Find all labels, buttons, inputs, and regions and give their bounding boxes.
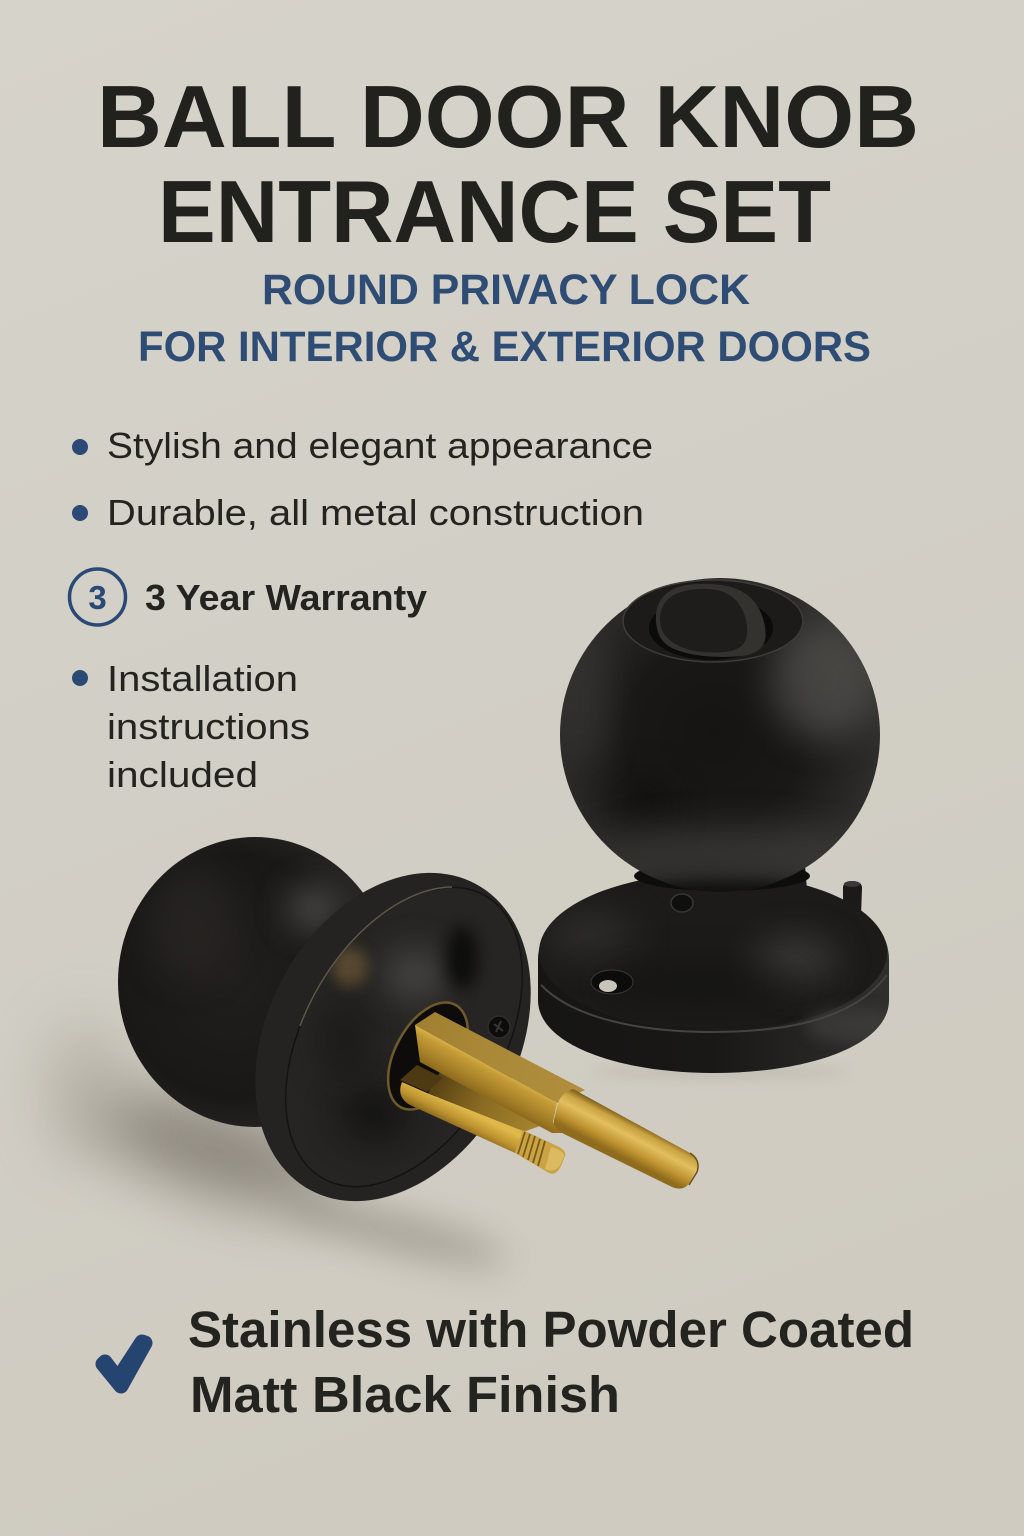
title: ENTRANCE SET — [158, 162, 831, 261]
bullet: installation instructions: included — [107, 754, 258, 795]
screw hole — [591, 970, 633, 994]
feature list — [70, 425, 653, 795]
icon: check mark — [103, 1342, 145, 1386]
locating pin — [843, 881, 862, 919]
warranty badge and label: 3 — [88, 579, 107, 616]
title — [97, 67, 919, 261]
bullet: durable construction: Durable, all metal construction — [107, 492, 644, 533]
subtitle: FOR INTERIOR & EXTERIOR DOORS — [138, 323, 871, 371]
bullet: installation instructions — [72, 658, 310, 795]
subtitle — [138, 266, 871, 371]
tilted door knob with spindle — [118, 837, 699, 1202]
bullet: stylish appearance: Stylish and elegant appearance — [107, 425, 653, 466]
subtitle: ROUND PRIVACY LOCK — [262, 266, 750, 314]
rose plate — [256, 872, 531, 1202]
bullet: installation instructions: instructions — [107, 706, 310, 747]
knob ball — [557, 578, 880, 905]
thumb turn recess — [623, 580, 803, 662]
neck set screw — [671, 894, 693, 912]
finish statement: Stainless with Powder Coated — [188, 1301, 914, 1358]
spindle opening — [372, 989, 484, 1123]
title: BALL DOOR KNOB — [97, 67, 919, 166]
knob base plate — [538, 873, 895, 1073]
floor shadows — [45, 1020, 850, 1277]
finish statement: Matt Black Finish — [190, 1366, 620, 1423]
square spindle — [415, 1012, 585, 1133]
standing door knob — [538, 578, 895, 1073]
knob ball side view — [118, 837, 363, 1127]
warranty badge and label: 3 Year Warranty — [145, 577, 427, 618]
bullet: installation instructions: Installation — [107, 658, 298, 699]
retaining screw — [488, 1016, 510, 1038]
knob neck — [557, 868, 838, 986]
spindle pin — [554, 1089, 698, 1189]
thumb turn button — [656, 584, 766, 657]
threaded rod — [400, 1065, 565, 1174]
finish statement — [188, 1301, 914, 1423]
warranty badge and label — [70, 569, 427, 625]
